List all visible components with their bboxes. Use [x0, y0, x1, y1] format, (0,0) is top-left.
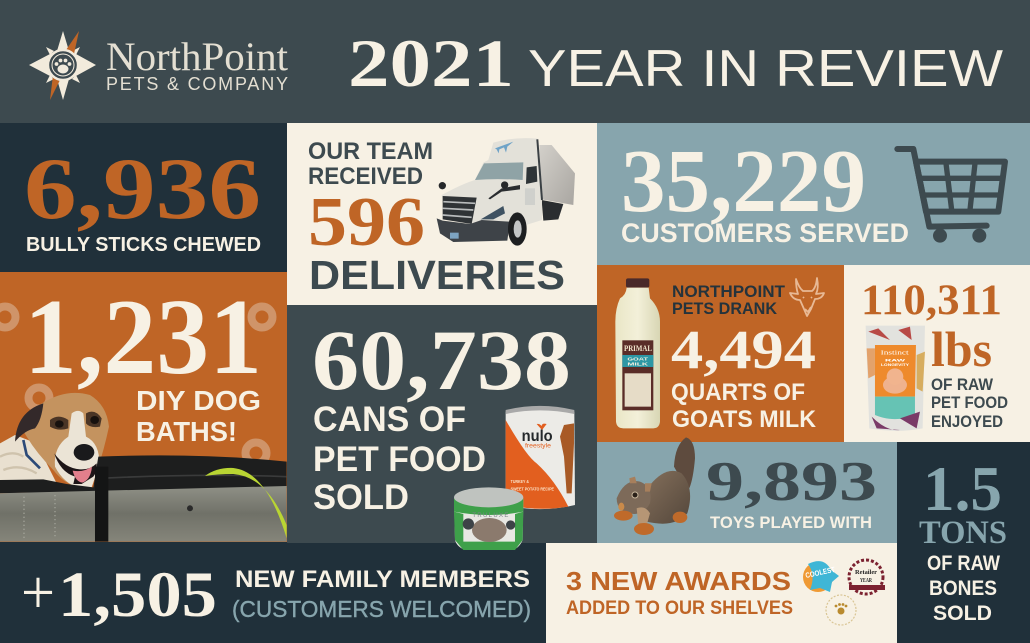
photo: instinct bag: RAW	[885, 359, 906, 363]
stat label: QUARTS OF	[671, 379, 805, 406]
title	[348, 25, 1003, 101]
stat number: 596	[308, 184, 425, 261]
stat sublabel: (CUSTOMERS WELCOMED)	[232, 596, 531, 622]
brand name: NorthPoint	[106, 34, 288, 79]
photo: nulo can: TURKEY &	[511, 479, 529, 484]
photo: instinct bag: LONGEVITY	[881, 363, 910, 367]
panel: dog baths	[0, 272, 287, 542]
panel: customers served	[597, 123, 1030, 265]
panel: raw bones	[897, 442, 1030, 643]
photo: nulo can: SWEET POTATO RECIPE	[511, 487, 554, 492]
awards subheading: ADDED TO OUR SHELVES	[566, 598, 793, 619]
panel: cans of pet food	[287, 305, 597, 550]
photo: squirrel toy	[614, 437, 695, 535]
stat number: 1,231	[24, 278, 262, 397]
stat unit: lbs	[931, 321, 992, 377]
stat number: 110,311	[861, 277, 1002, 324]
photo: milk bottle: GOAT	[627, 357, 648, 363]
stat number: 1,505	[58, 559, 217, 631]
award badge: gold seal	[826, 595, 856, 625]
photo: milk bottle	[615, 278, 660, 428]
awards heading: 3 NEW AWARDS	[566, 566, 791, 596]
stat label	[313, 400, 486, 517]
stat label: PET FOOD	[313, 440, 486, 479]
intro text	[308, 138, 433, 190]
intro text: PETS DRANK	[672, 299, 778, 318]
stat number: 1.5	[923, 453, 1002, 524]
stat label: OF RAW	[927, 552, 1000, 575]
photo: nulo can: nulo	[522, 428, 553, 445]
stat number: +	[21, 559, 55, 627]
stat label: ENJOYED	[931, 412, 1003, 431]
photo: dog in tub	[0, 393, 287, 542]
title: 2021	[348, 25, 514, 101]
panel: bully sticks	[0, 123, 287, 273]
stat label: PET FOOD	[931, 393, 1008, 412]
stat number: 6,936	[24, 141, 261, 238]
icon: shopping cart	[897, 149, 1005, 243]
stat label: BULLY STICKS CHEWED	[26, 234, 261, 256]
icon: compass paw	[29, 31, 96, 100]
panel: raw pet food	[844, 265, 1030, 442]
stat label: GOATS MILK	[672, 406, 817, 433]
stat unit: TONS	[919, 515, 1007, 551]
stat label	[927, 552, 1000, 625]
photo: truluxe can	[454, 487, 523, 550]
photo: delivery truck	[437, 138, 575, 246]
award badge: retailer of the year	[849, 560, 885, 594]
intro text: NORTHPOINT	[672, 282, 786, 301]
panel: header	[0, 0, 1030, 124]
photo: instinct bag: Instinct	[881, 349, 909, 356]
stat number: 60,738	[312, 312, 571, 408]
panel: awards	[546, 543, 897, 643]
stat label	[671, 379, 817, 433]
award badge: retailer of the year: YEAR	[860, 578, 872, 584]
stat label	[931, 375, 1008, 431]
panel: goats milk	[597, 265, 844, 442]
stat label: SOLD	[313, 478, 409, 517]
stat label: BATHS!	[136, 416, 237, 447]
icon: goat	[790, 278, 824, 316]
photo: truluxe can: TRULUXE	[472, 513, 508, 519]
panel: toys	[597, 437, 897, 543]
stat label	[136, 385, 261, 447]
photo: nulo can	[506, 406, 575, 509]
stat label: SOLD	[933, 602, 992, 625]
decorative rings	[0, 306, 272, 464]
panel: new family members	[0, 542, 546, 643]
intro text: OUR TEAM	[308, 138, 433, 165]
panel: deliveries	[287, 123, 597, 305]
photo: nulo can: freestyle	[525, 444, 552, 450]
stat label: TOYS PLAYED WITH	[710, 513, 872, 532]
stat number: 4,494	[671, 319, 816, 380]
stat label: CUSTOMERS SERVED	[621, 218, 909, 248]
brand subtitle: PETS & COMPANY	[106, 74, 288, 94]
stat label: DIY DOG	[136, 385, 261, 416]
photo: milk bottle: MILK	[627, 362, 649, 368]
intro text: RECEIVED	[308, 163, 423, 190]
logo	[29, 31, 288, 100]
stat label: OF RAW	[931, 375, 994, 394]
photo: instinct bag	[866, 326, 925, 431]
title: YEAR IN REVIEW	[528, 40, 1003, 98]
stat number: 35,229	[621, 132, 866, 231]
intro text	[672, 282, 786, 318]
photo: milk bottle: PRIMAL	[624, 344, 652, 353]
stat label: CANS OF	[313, 400, 466, 439]
stat label: DELIVERIES	[309, 252, 565, 298]
stat number: 9,893	[706, 451, 877, 513]
award badge: America's coolest	[803, 561, 839, 592]
stat label: BONES	[929, 577, 997, 600]
stat label: NEW FAMILY MEMBERS	[235, 566, 530, 593]
award badge: retailer of the year: Retailer	[855, 569, 877, 576]
award badge: America's coolest: COOLEST	[805, 565, 836, 580]
